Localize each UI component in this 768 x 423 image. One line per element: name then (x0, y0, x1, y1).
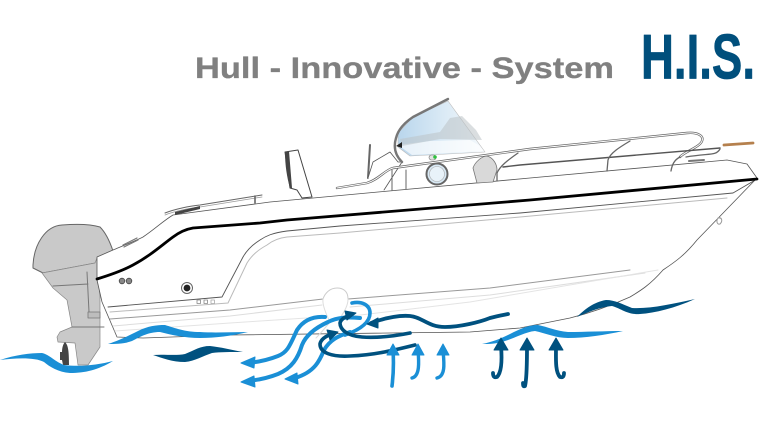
hull fittings (119, 238, 214, 304)
black rub rail stripe (97, 179, 757, 279)
stern rail (165, 195, 262, 215)
green nav light (429, 155, 437, 160)
outboard motor (33, 224, 113, 365)
dark blue swirl arrows (320, 311, 415, 356)
dark blue up arrows (493, 338, 564, 386)
console and windshield (368, 99, 497, 190)
porthole (426, 164, 448, 184)
title: Hull - Innovative - System (195, 52, 614, 85)
light blue wave: aft hull (108, 325, 248, 344)
dark blue wave: bow (577, 299, 695, 317)
light blue wave: stern (0, 353, 113, 373)
helm seat (285, 150, 312, 198)
light blue flow arrows leaving the step (241, 302, 370, 387)
side and bow rails (337, 133, 720, 188)
light blue wave: mid hull (482, 325, 623, 344)
boat hull outline (97, 160, 757, 338)
light blue up arrows (387, 344, 449, 386)
dark blue wave arrow (367, 314, 508, 328)
bow anchor plank (724, 143, 753, 145)
dark blue wave: aft (153, 346, 243, 362)
